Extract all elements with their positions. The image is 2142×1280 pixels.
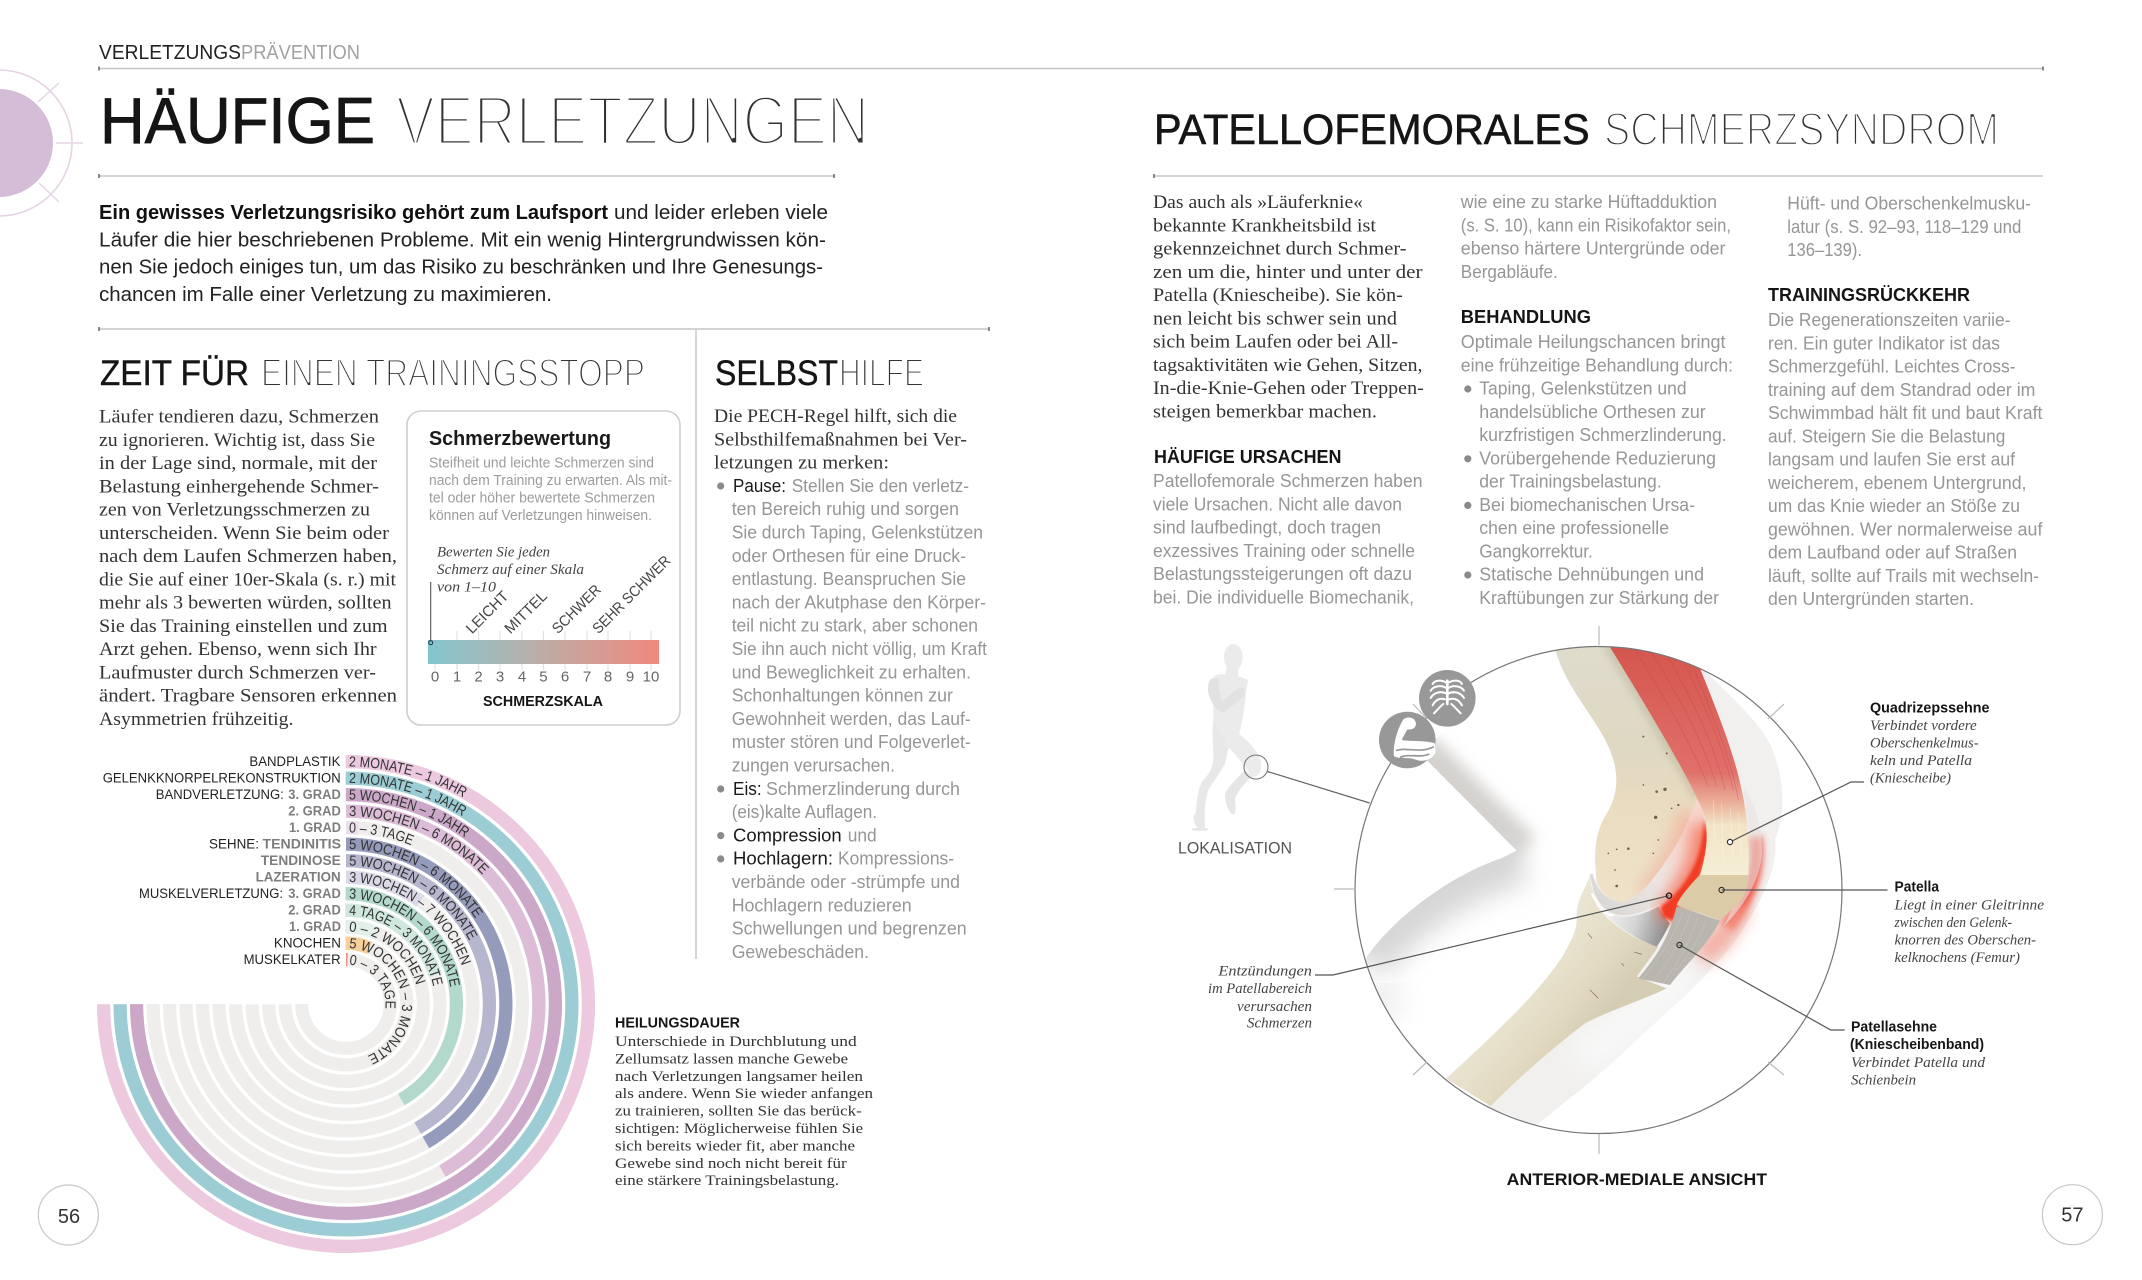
chart row labels: MUSKELKATER <box>244 952 341 967</box>
text block: Heilungsdauer <box>615 1016 874 1189</box>
chart curved duration labels: 5 WOCHEN – 6 MONATE <box>350 839 484 918</box>
text column 1: In-die-Knie-Gehen oder Treppen- <box>1153 379 1424 399</box>
pain scale chart <box>428 552 674 710</box>
thigh and calf shading <box>1350 750 1520 1013</box>
bullet list: entlastung. Beanspruchen Sie <box>732 569 966 589</box>
femoral cartilage <box>1589 797 1704 915</box>
callout: Patellasehne: Verbindet Patella und <box>1851 1055 1986 1071</box>
text block: Trainingsstopp: Läufer tendieren dazu, Schmerzen <box>99 408 379 428</box>
callout: Patella: Patella <box>1894 880 1940 896</box>
page number 56 <box>38 1185 98 1245</box>
text column 2: Bergabläufe. <box>1461 262 1558 282</box>
text block: Trainingsstopp: ändert. Tragbare Sensoren erkennen <box>99 687 397 707</box>
outer bursa and glow <box>1727 837 1756 927</box>
text: Behandlung list: Taping, Gelenkstützen und <box>1479 378 1687 398</box>
heading: Selbsthilfe <box>715 352 924 395</box>
chart ring backgrounds and bars <box>104 762 588 1246</box>
text: Ursachen: exzessives Training oder schnelle <box>1153 541 1415 561</box>
text: Ursachen: viele Ursachen. Nicht alle davon <box>1153 494 1402 514</box>
text block: Heilungsdauer: Zellumsatz lassen manche Gewebe <box>615 1051 848 1067</box>
text block: Heilungsdauer: nach Verletzungen langsamer heilen <box>615 1069 864 1085</box>
text column 1: Das auch als »Läuferknie« <box>1153 193 1363 213</box>
connector: runner to circle <box>1268 772 1370 803</box>
pain scale chart: 4 <box>518 669 526 686</box>
page number 57: 57 <box>2061 1205 2084 1227</box>
text block: Heilungsdauer: HEILUNGSDAUER <box>615 1016 741 1032</box>
callout: Patella <box>1719 880 2045 966</box>
chart curved duration labels: 0 – 2 WOCHEN <box>350 922 426 984</box>
chart row labels: BANDPLASTIK <box>249 754 340 769</box>
bullet list: Stellen Sie den verletz- <box>792 476 969 496</box>
chart curved duration labels: 3 WOCHEN – 6 MONATE <box>350 806 490 874</box>
pain scale chart: 7 <box>583 669 591 686</box>
callout: Quadrizepssehne: keln und Patella <box>1870 753 1972 769</box>
scale note <box>437 545 584 596</box>
text column 3: Hüft- und Oberschenkelmusku- <box>1787 194 2031 214</box>
chart curved duration labels: 5 WOCHEN – 3 MONATE <box>350 938 412 1065</box>
chart curved duration labels: 3 WOCHEN – 7 WOCHEN <box>350 872 471 965</box>
text block: PECH-Regel: Selbsthilfemaßnahmen bei Ver- <box>714 430 967 450</box>
title: Häufige Verletzungen: HÄUFIGE <box>100 84 375 157</box>
text: Behandlung list: Statische Dehnübungen und <box>1479 565 1704 585</box>
subheading: Trainingsrückkehr: TRAININGSRÜCKKEHR <box>1768 284 1970 305</box>
pain scale chart: LEICHT <box>463 588 512 637</box>
text block: Trainingsstopp <box>99 408 397 730</box>
heading: Zeit für einen Trainingsstopp <box>100 352 645 395</box>
text column 1: zen um die, hinter und unter der <box>1153 263 1422 283</box>
illustration: knee anatomy in circle <box>1268 626 1842 1154</box>
corner decoration: purple circle <box>0 70 83 216</box>
scale note: von 1–10 <box>437 580 497 596</box>
text column 1: tagsaktivitäten wie Gehen, Sitzen, <box>1153 356 1422 376</box>
panel text: tel oder höher bewertete Schmerzen <box>429 490 655 506</box>
callout: Quadrizepssehne: (Kniescheibe) <box>1870 770 1951 786</box>
text column 3: 136–139). <box>1787 240 1862 260</box>
pain scale chart: 10 <box>643 669 659 686</box>
text: Behandlung list: der Trainingsbelastung. <box>1479 472 1662 492</box>
chart curved duration labels: 0 – 3 TAGE <box>350 954 396 1008</box>
patellar tendon <box>1638 907 1720 985</box>
text column 1: nen leicht bis schwer sein und <box>1153 309 1398 329</box>
text: Trainingsrückkehr: läuft, sollte auf Trails mit wechseln- <box>1768 566 2039 586</box>
text block: Trainingsstopp: Arzt gehen. Ebenso, wenn sich Ihr <box>99 640 377 660</box>
callout: Patellasehne: Schienbein <box>1851 1072 1916 1088</box>
chart row labels: 2. GRAD <box>288 804 341 818</box>
chart curved duration labels: 4 TAGE – 3 MONATE <box>349 905 443 986</box>
pain scale chart: 1 <box>453 669 461 686</box>
femur <box>1554 645 1698 902</box>
quadriceps muscle and tendon <box>1609 645 1749 875</box>
bullet list: Gewohnheit werden, das Lauf- <box>732 709 971 729</box>
icon: muscle arm <box>1379 712 1436 768</box>
bullet list: zungen verursachen. <box>732 756 895 776</box>
text block: PECH-Regel: Die PECH-Regel hilft, sich die <box>714 407 957 427</box>
text column 2 <box>1460 192 1733 608</box>
bullet list <box>717 476 987 962</box>
callout: Entzündungen <box>1208 893 1672 1031</box>
text: Trainingsrückkehr <box>1767 310 2043 609</box>
intro paragraph: nen Sie jedoch einiges tun, um das Risiko zu beschränken und Ihre Genesungs- <box>99 257 823 279</box>
text: Behandlung list: Gangkorrektur. <box>1479 541 1593 561</box>
bullet list: und Beweglichkeit zu erhalten. <box>732 662 971 682</box>
pain scale chart: 9 <box>626 669 634 686</box>
pain scale chart: 5 <box>539 669 548 686</box>
callout: Patella: knorren des Oberschen- <box>1894 932 2036 948</box>
intro paragraph: chancen im Falle einer Verletzung zu maximieren. <box>99 284 552 306</box>
chart row labels: GELENKKNORPELREKONSTRUKTION <box>103 770 341 786</box>
running header: PRÄVENTION <box>241 42 360 64</box>
text column 3 <box>1767 194 2043 609</box>
text block: PECH-Regel: letzungen zu merken: <box>714 454 889 474</box>
callout: Patellasehne: (Kniescheibenband) <box>1850 1037 1984 1053</box>
text block: PECH-Regel <box>714 407 987 962</box>
pain scale chart: 0 <box>431 669 439 686</box>
bullet list: und <box>848 825 877 845</box>
bullet list: (eis)kalte Auflagen. <box>732 802 877 822</box>
bullet list: Eis: <box>733 779 762 799</box>
text column 1: gekennzeichnet durch Schmer- <box>1153 240 1407 260</box>
text: Trainingsrückkehr: Schwimmbad hält fit und baut Kraft <box>1768 403 2042 423</box>
bullet list: Schmerzlinderung durch <box>766 779 960 799</box>
page number 56: 56 <box>58 1206 80 1228</box>
text: Behandlung list: Bei biomechanischen Ursa- <box>1479 495 1695 515</box>
intro paragraph: und leider erleben viele <box>614 202 828 224</box>
text block: Trainingsstopp: zu ignorieren. Wichtig ist, dass Sie <box>99 431 375 451</box>
chart row labels: 3. GRAD <box>288 886 341 901</box>
text: Behandlung list: Optimale Heilungschancen bringt <box>1461 332 1726 352</box>
text: Behandlung list: chen eine professionelle <box>1479 518 1669 538</box>
text block: Heilungsdauer: sich bereits wieder fit, aber manche <box>615 1138 855 1154</box>
tibial cartilage <box>1613 906 1670 946</box>
chart curved duration labels: 0 – 3 TAGE <box>350 822 414 846</box>
text: Trainingsrückkehr: Die Regenerationszeiten variie- <box>1768 310 2010 330</box>
panel heading: Schmerzbewertung <box>429 428 611 450</box>
text block: Trainingsstopp: zen von Verletzungsschmerzen zu <box>99 501 370 521</box>
heading: Selbsthilfe: HILFE <box>839 352 924 395</box>
text: Behandlung list: Vorübergehende Reduzierung <box>1479 448 1716 468</box>
pain scale chart: SCHMERZSKALA <box>483 694 604 710</box>
intro paragraph: Läufer die hier beschriebenen Probleme. Mit ein wenig Hintergrundwissen kön- <box>99 229 826 251</box>
bullet list: Hochlagern: <box>733 849 833 869</box>
scale note: Bewerten Sie jeden <box>437 545 550 561</box>
bullet list: Sie durch Taping, Gelenkstützen <box>732 522 983 542</box>
text: Trainingsrückkehr: weicherem, ebenem Untergrund, <box>1767 473 2026 493</box>
callout: Quadrizepssehne: Oberschenkelmus- <box>1870 736 1979 752</box>
bullet list: verbände oder -strümpfe und <box>732 872 960 892</box>
text column 3: latur (s. S. 92–93, 118–129 und <box>1787 217 2021 237</box>
chart row labels: LAZERATION <box>256 870 341 884</box>
chart curved duration labels: 2 MONATE – 1 JAHR <box>350 756 466 798</box>
text column 1: steigen bemerkbar machen. <box>1153 402 1377 422</box>
callout: Patellasehne <box>1677 942 1986 1088</box>
chart row labels: 3. GRAD <box>288 787 341 802</box>
text block: Trainingsstopp: unterscheiden. Wenn Sie beim oder <box>99 524 389 544</box>
text column 1: Patella (Kniescheibe). Sie kön- <box>1153 286 1403 306</box>
pain scale chart: SEHR SCHWER <box>589 552 674 637</box>
callout: Patella: kelknochens (Femur) <box>1894 950 2020 966</box>
scale note: Schmerz auf einer Skala <box>437 562 584 578</box>
pain scale chart: 3 <box>496 669 504 686</box>
chart curved duration labels: 5 WOCHEN – 6 MONATE <box>350 856 478 940</box>
tibia <box>1446 877 1667 1106</box>
pain scale chart: SCHWER <box>549 581 605 637</box>
text: Trainingsrückkehr: Schmerzgefühl. Leichtes Cross- <box>1768 356 2016 376</box>
bullet list: Kompressions- <box>838 849 954 869</box>
text block: Trainingsstopp: Laufmuster durch Schmerzen ver- <box>99 664 376 684</box>
red inflammation <box>1668 823 1705 920</box>
callout: Quadrizepssehne: Verbindet vordere <box>1870 718 1977 734</box>
callout: Patellasehne: Patellasehne <box>1851 1020 1937 1036</box>
text: Ursachen: Belastungssteigerungen oft dazu <box>1153 564 1412 584</box>
text: Ursachen: sind laufbedingt, doch tragen <box>1153 518 1381 538</box>
chart curved duration labels: 3 WOCHEN – 6 MONATE <box>350 888 460 987</box>
bullet list: ten Bereich ruhig und sorgen <box>732 499 959 519</box>
panel text: Steifheit und leichte Schmerzen sind <box>429 455 654 471</box>
bullet list: Schwellungen und begrenzen <box>732 919 967 939</box>
text block: Heilungsdauer: zu trainieren, sollten Sie das berück- <box>615 1104 862 1120</box>
chart row labels: 2. GRAD <box>288 902 341 918</box>
callout: Quadrizepssehne: Quadrizepssehne <box>1870 701 1990 717</box>
text: Trainingsrückkehr: ren. Ein guter Indikator ist das <box>1768 333 2000 353</box>
title: Patellofemorales Schmerzsyndrom: SCHMERZSYNDROM <box>1604 103 1999 155</box>
text block: Heilungsdauer: Unterschiede in Durchblutung und <box>615 1034 857 1050</box>
text block: Trainingsstopp: mehr als 3 bewerten würden, sollten <box>99 594 392 614</box>
chart row labels: BANDVERLETZUNG: <box>156 787 284 802</box>
running header <box>99 42 360 64</box>
text block: Trainingsstopp: Belastung einhergehende Schmer- <box>99 478 379 498</box>
text column 2: ebenso härtere Untergründe oder <box>1461 238 1726 258</box>
callout: Entzündungen: im Patellabereich <box>1208 981 1312 997</box>
bullet list: Compression <box>733 825 842 845</box>
text block: Trainingsstopp: Asymmetrien frühzeitig. <box>99 710 294 730</box>
text: Ursachen: Patellofemorale Schmerzen haben <box>1153 471 1422 491</box>
circle outline <box>1355 646 1842 1134</box>
text block: Heilungsdauer: eine stärkere Trainingsbelastung. <box>615 1173 839 1189</box>
text: Behandlung list: kurzfristigen Schmerzlinderung. <box>1479 425 1727 445</box>
text: Trainingsrückkehr: training auf dem Standrad oder im <box>1768 380 2035 400</box>
intro paragraph <box>99 202 828 306</box>
heading: Selbsthilfe: SELBST <box>715 354 838 393</box>
chart row labels: KNOCHEN <box>274 936 341 950</box>
panel text: können auf Verletzungen hinweisen. <box>429 508 652 524</box>
radial chart: Heilungsdauer <box>97 754 595 1253</box>
text block: Heilungsdauer: Gewebe sind noch nicht bereit für <box>615 1156 847 1172</box>
bullet list: Pause: <box>733 476 786 496</box>
text block: Trainingsstopp: nach dem Laufen Schmerzen haben, <box>99 547 397 567</box>
panel text: nach dem Training zu erwarten. Als mit- <box>429 473 672 489</box>
knee marker <box>1244 755 1268 779</box>
text: Trainingsrückkehr: auf. Steigern Sie die Belastung <box>1768 426 2005 446</box>
pain scale chart: 8 <box>604 669 612 686</box>
pain scale chart: 2 <box>474 669 483 686</box>
chart row labels: 1. GRAD <box>289 919 341 934</box>
chart row labels: SEHNE: <box>209 836 259 852</box>
callout: Patella: zwischen den Gelenk- <box>1894 915 2012 931</box>
bullet list: Schonhaltungen können zur <box>732 686 953 706</box>
bullet list: Sie ihn auch nicht völlig, um Kraft <box>732 639 987 659</box>
text block: Heilungsdauer: als andere. Wenn Sie wieder anfangen <box>615 1086 874 1102</box>
soft tissue <box>1487 660 1782 1126</box>
text: Trainingsrückkehr: um das Knie wieder an Stöße zu <box>1768 496 2020 516</box>
heading: Zeit für einen Trainingsstopp: ZEIT FÜR <box>100 354 249 393</box>
text: Trainingsrückkehr: gewöhnen. Wer normalerweise auf <box>1768 519 2043 539</box>
text: Ursachen <box>1153 471 1422 608</box>
bullet list: oder Orthesen für eine Druck- <box>732 546 966 566</box>
chart curved duration labels <box>349 756 490 1065</box>
title: Häufige Verletzungen <box>100 82 869 160</box>
pain scale chart: MITTEL <box>501 588 551 637</box>
illustration caption: ANTERIOR-MEDIALE ANSICHT <box>1507 1170 1768 1189</box>
text: Behandlung list: eine frühzeitige Behandlung durch: <box>1461 355 1733 375</box>
text column 1 <box>1153 193 1424 608</box>
subheading: Häufige Ursachen: HÄUFIGE URSACHEN <box>1154 446 1342 467</box>
title: Patellofemorales Schmerzsyndrom <box>1154 103 1999 155</box>
figure: runner with knee marker <box>1191 644 1268 831</box>
panel text <box>429 455 672 524</box>
text: Trainingsrückkehr: dem Laufband oder auf Straßen <box>1768 542 2017 562</box>
intro paragraph: Ein gewisses Verletzungsrisiko gehört zum Laufsport <box>99 202 608 224</box>
patella <box>1677 875 1748 920</box>
title: Patellofemorales Schmerzsyndrom: PATELLOFEMORALES <box>1154 107 1590 154</box>
text: Ursachen: bei. Die individuelle Biomechanik, <box>1153 588 1414 608</box>
bullet list: nach der Akutphase den Körper- <box>732 592 986 612</box>
chart row labels <box>103 754 341 967</box>
bullet list: muster stören und Folgeverlet- <box>732 732 971 752</box>
text column 1: sich beim Laufen oder bei All- <box>1153 332 1398 352</box>
chart row labels: TENDINOSE <box>261 853 341 868</box>
text column 1: bekannte Krankheitsbild ist <box>1153 216 1377 236</box>
pain scale chart: 6 <box>561 669 569 686</box>
running header: VERLETZUNGS <box>99 42 241 64</box>
text column 2: wie eine zu starke Hüftadduktion <box>1460 192 1717 212</box>
text block: Trainingsstopp: die Sie auf einer 10er-Skala (s. r.) mit <box>99 570 397 590</box>
chart row labels: TENDINITIS <box>262 836 341 852</box>
bullet list: Gewebeschäden. <box>732 942 869 962</box>
callout: Entzündungen: Entzündungen <box>1217 964 1312 980</box>
callout: Patella: Liegt in einer Gleitrinne <box>1893 898 2045 914</box>
heading: Zeit für einen Trainingsstopp: EINEN TRAININGSSTOPP <box>261 352 645 395</box>
bullet list: Hochlagern reduzieren <box>732 895 912 915</box>
crosshair ticks <box>1334 626 1784 1154</box>
chart curved duration labels: 2 MONATE – 1 JAHR <box>350 772 466 816</box>
label: Lokalisation: LOKALISATION <box>1178 839 1292 858</box>
title: Häufige Verletzungen: VERLETZUNGEN <box>396 82 869 160</box>
text: Behandlung list: Kraftübungen zur Stärkung der <box>1479 588 1719 608</box>
callout: Entzündungen: verursachen <box>1237 999 1312 1015</box>
chart row labels: 1. GRAD <box>289 820 341 835</box>
panel: Schmerzbewertung <box>407 411 680 725</box>
chart curved duration labels: 5 WOCHEN – 1 JAHR <box>350 789 469 838</box>
chart row labels: MUSKELVERLETZUNG: <box>139 886 283 901</box>
text: Behandlung list: handelsübliche Orthesen zur <box>1479 402 1706 422</box>
text block: Trainingsstopp: in der Lage sind, normale, mit der <box>99 454 377 474</box>
subheading: Behandlung: BEHANDLUNG <box>1461 306 1591 327</box>
text block: Trainingsstopp: Sie das Training einstellen und zum <box>99 617 388 637</box>
icon: rib cage <box>1419 670 1476 727</box>
bullet list: teil nicht zu stark, aber schonen <box>732 616 978 636</box>
text: Behandlung list <box>1461 332 1733 608</box>
text: Trainingsrückkehr: langsam und laufen Sie erst auf <box>1768 450 2016 470</box>
page number 57 <box>2042 1185 2102 1245</box>
text block: Heilungsdauer: sichtigen: Möglicherweise fühlen Sie <box>615 1121 863 1137</box>
text column 2: (s. S. 10), kann ein Risikofaktor sein, <box>1461 215 1731 235</box>
callout: Quadrizepssehne <box>1727 701 1990 845</box>
callout: Entzündungen: Schmerzen <box>1247 1015 1312 1031</box>
text: Trainingsrückkehr: den Untergründen starten. <box>1768 589 1974 609</box>
